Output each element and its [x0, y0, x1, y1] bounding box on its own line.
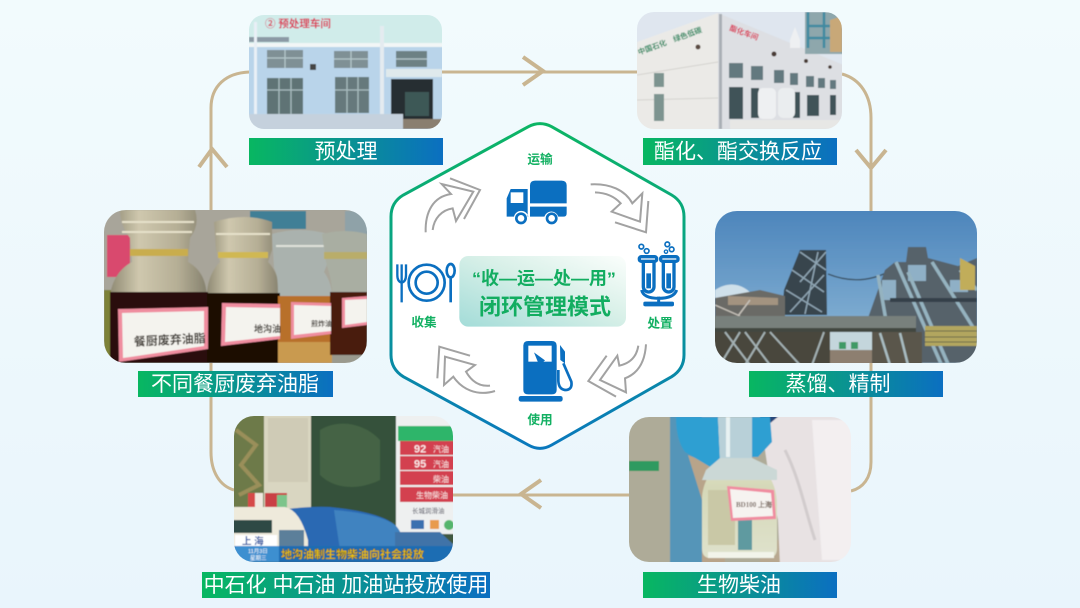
panel: biodiesel — [625, 413, 855, 598]
photo: biodiesel sample bottle: BD100 上海 — [736, 500, 772, 509]
icon: fuel pump — [519, 341, 572, 402]
icon: test tubes — [639, 242, 678, 306]
panel: gas station — [202, 412, 490, 598]
arrow: pretreatment to esterification — [523, 57, 543, 85]
arrow: use to collection — [437, 347, 495, 393]
photo: waste oil bottles: 煎炸油 — [311, 319, 332, 328]
photo: waste oil bottles: 餐厨废弃油脂 — [133, 330, 206, 349]
photo: filling station news frame: 长城润滑油 — [412, 506, 444, 515]
center title box: 闭环管理模式 — [479, 294, 611, 319]
photo: pretreatment workshop: ② 预处理车间 — [265, 17, 331, 30]
arrow: collection to transport — [426, 178, 480, 232]
photo: esterification workshop: 酯化车间 — [728, 22, 760, 42]
icon: truck — [507, 181, 567, 223]
label: processing: 处置 — [647, 315, 673, 330]
center title box — [459, 256, 626, 327]
label: collection: 收集 — [411, 314, 437, 329]
photo: filling station news frame: 星期三 — [250, 555, 267, 562]
hexagon frame — [391, 124, 684, 448]
arrow: biodiesel to gas station — [521, 480, 541, 508]
panel: closed-loop hexagon — [391, 124, 684, 448]
photo: filling station news frame: 地沟油制生物柴油向社会投放 — [281, 547, 424, 561]
photo: filling station news frame: 11月3日 — [248, 548, 268, 555]
label: biodiesel: 生物柴油 — [697, 574, 781, 597]
label: use: 使用 — [527, 412, 553, 427]
photo: filling station news frame: 95 — [414, 458, 426, 470]
label: pretreatment — [249, 138, 443, 165]
process loop connector — [211, 72, 871, 495]
photo: pretreatment workshop — [249, 15, 442, 129]
center title box: “收—运—处—用” — [472, 268, 616, 288]
panel: pretreatment — [245, 11, 446, 165]
label: transport: 运输 — [527, 151, 553, 166]
photo: filling station news frame: 生物柴油 — [416, 490, 448, 500]
photo: filling station news frame: 92 — [414, 444, 426, 456]
photo: esterification workshop: 中国石化 绿色低碳 — [636, 24, 704, 57]
label: waste cooking oil: 不同餐厨废弃油脂 — [151, 373, 319, 396]
photo: biodiesel sample bottle — [625, 413, 855, 566]
arrow: waste oil to pretreatment — [199, 149, 227, 167]
label: distillation: 蒸馏、精制 — [786, 373, 890, 396]
label: esterification: 酯化、酯交换反应 — [654, 140, 822, 164]
icon: plate and cutlery — [397, 264, 455, 302]
label: distillation — [749, 371, 943, 397]
photo: filling station news frame: 柴油 — [433, 474, 449, 484]
label: biodiesel — [643, 572, 837, 598]
arrow: esterification to distillation — [856, 150, 886, 168]
label: pretreatment: 预处理 — [314, 140, 378, 164]
panel: distillation — [711, 207, 981, 397]
photo: filling station news frame: 汽油 — [433, 459, 449, 469]
panel: esterification — [633, 8, 846, 165]
photo: filling station news frame: 汽油 — [433, 444, 449, 454]
label: gas station: 中石化 中石油 加油站投放使用 — [204, 574, 488, 597]
photo: esterification workshop — [633, 8, 846, 133]
photo: refinery towers — [711, 207, 981, 367]
arrow: processing to use — [588, 344, 646, 397]
panel: waste cooking oil — [100, 206, 371, 397]
photo: waste oil bottles: 地沟油 — [254, 323, 281, 334]
photo: filling station news frame — [230, 412, 457, 566]
photo: waste oil bottles — [100, 206, 371, 367]
photo: filling station news frame: 上 海 — [242, 536, 264, 548]
arrow: transport to processing — [591, 184, 648, 232]
